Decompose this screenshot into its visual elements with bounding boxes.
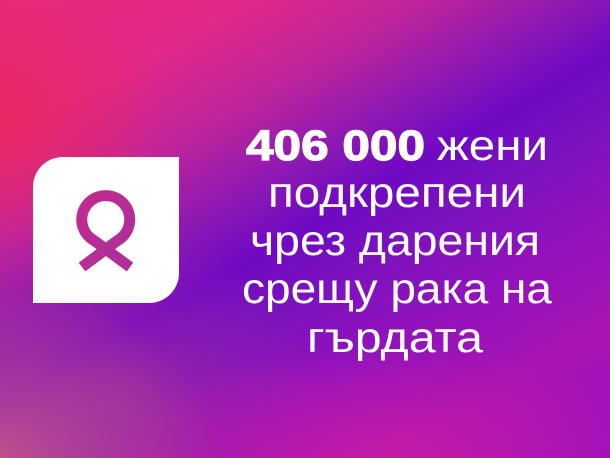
headline text xyxy=(242,122,552,362)
headline text: чрез дарения xyxy=(250,217,540,265)
icon: awareness ribbon xyxy=(82,196,130,267)
headline text: 406 000 xyxy=(246,122,425,170)
headline text: подкрепени xyxy=(268,169,526,217)
headline text: гърдата xyxy=(307,314,483,362)
headline text: срещу рака на xyxy=(242,265,552,313)
icon: white leaf card with ribbon xyxy=(33,157,179,303)
headline text: жени xyxy=(437,122,548,170)
